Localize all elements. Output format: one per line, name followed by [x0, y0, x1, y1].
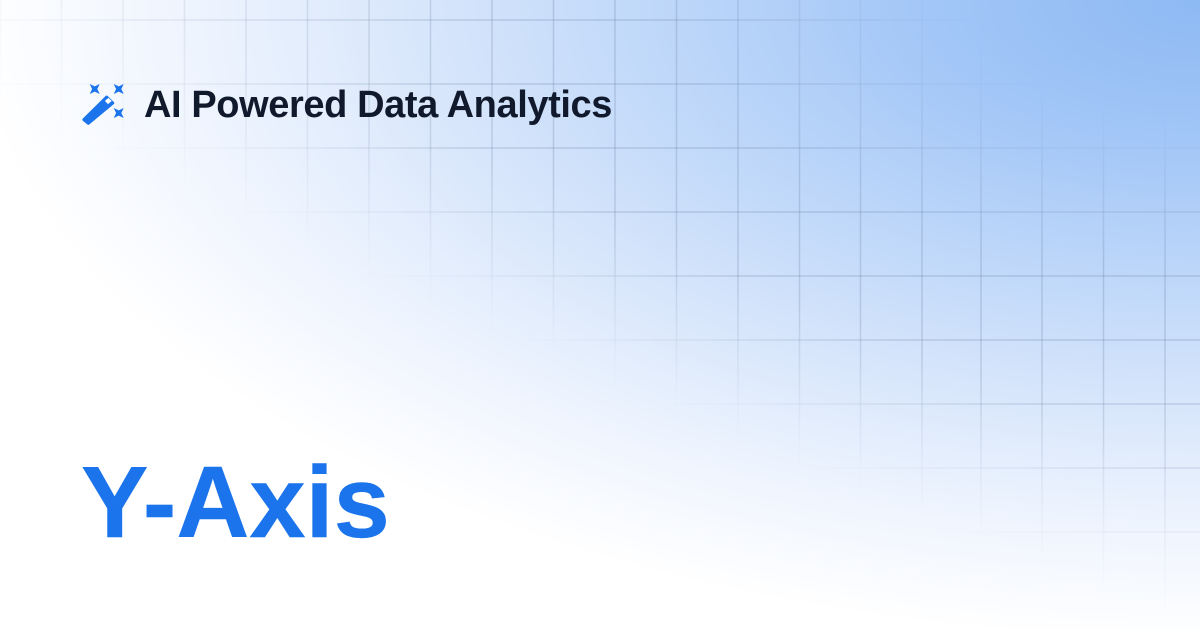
title: Y-Axis: [81, 447, 390, 559]
brand heading: AI Powered Data Analytics: [144, 84, 612, 126]
icon: magic wand with sparkles: [82, 84, 124, 125]
sparkles: [90, 84, 124, 118]
wand body: [84, 97, 113, 123]
